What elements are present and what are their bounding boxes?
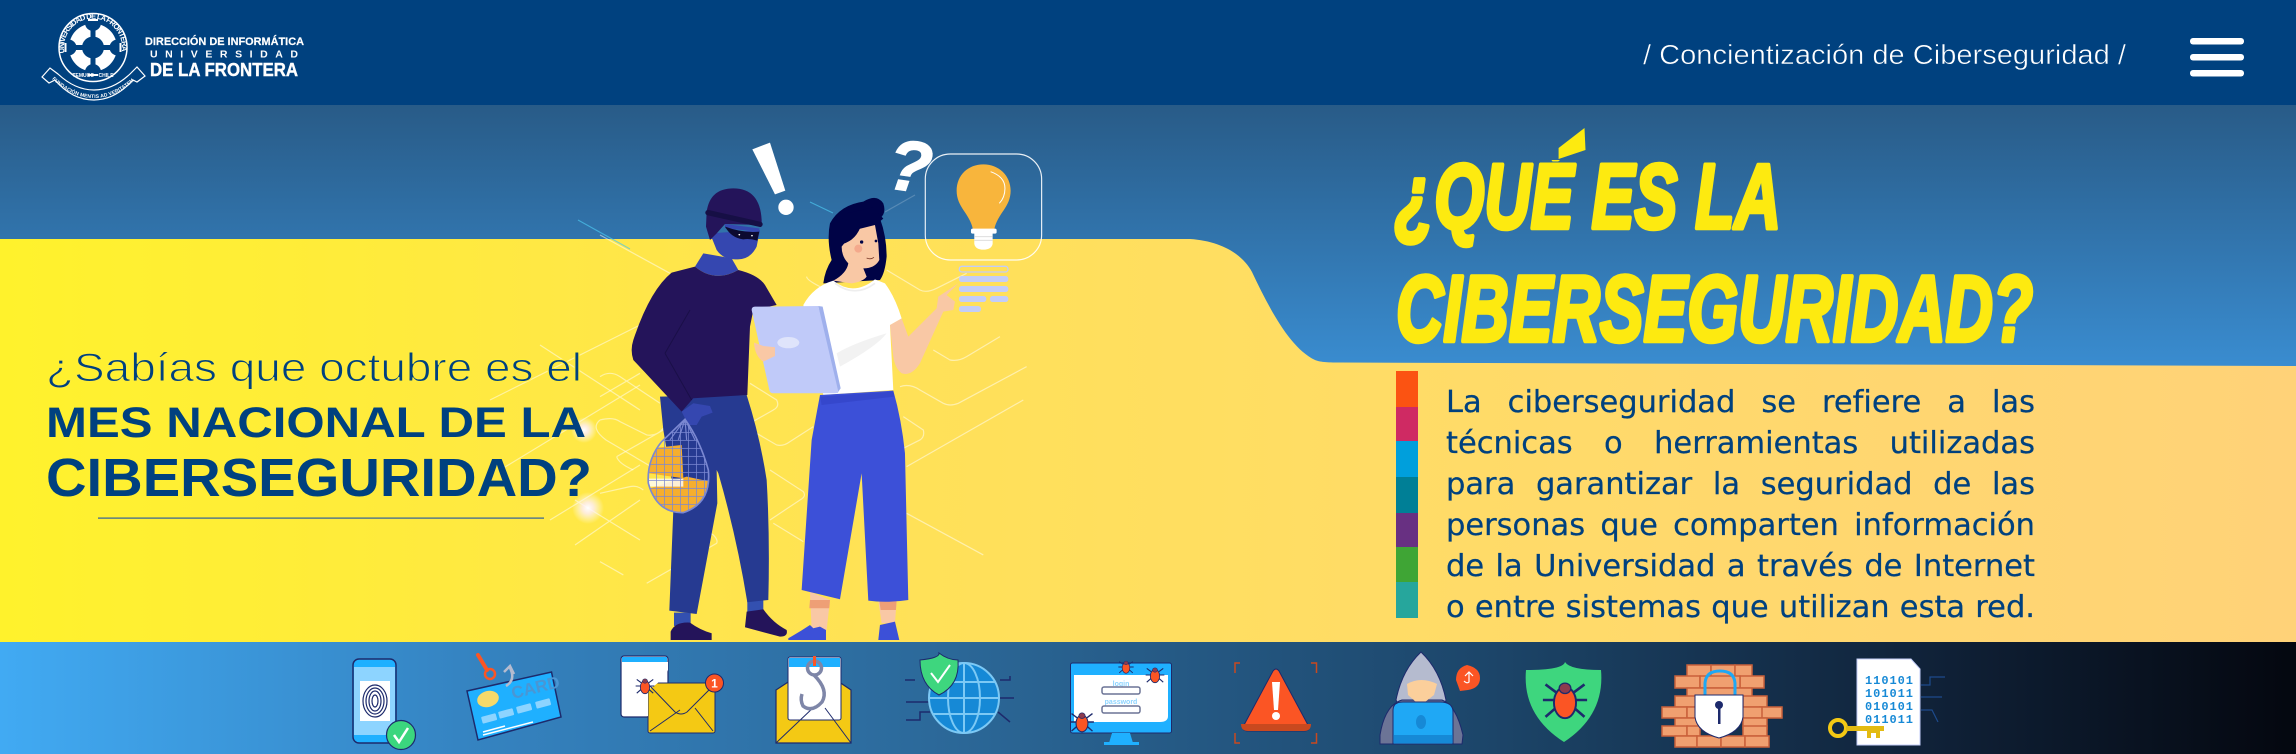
icon: lightbulb box <box>925 154 1042 260</box>
icon: hooded hacker <box>1380 652 1480 744</box>
yellow background wave <box>0 239 2296 645</box>
icon: binary document and key: 010101 <box>1865 700 1913 714</box>
paragraph: definition text: técnicas o herramientas utilizadas <box>1446 426 2035 461</box>
paragraph: definition text: La ciberseguridad se refiere a las <box>1446 385 2035 420</box>
paragraph: definition text <box>1446 385 2035 625</box>
intro question text: MES NACIONAL DE LA <box>46 399 586 447</box>
breadcrumb title: / Concientización de Ciberseguridad / <box>1643 39 2126 70</box>
icon: binary document and key: 011011 <box>1865 713 1913 727</box>
university logo: UNIVERSIDAD <box>150 48 298 60</box>
icon: malware email <box>621 656 724 733</box>
illustration: thief and woman <box>632 124 1042 640</box>
icon: text lines <box>959 266 1008 312</box>
intro question text: CIBERSEGURIDAD? <box>46 449 592 508</box>
circuit line background <box>490 195 1027 583</box>
icon: brick wall and padlock <box>1662 665 1782 747</box>
university logo: DE LA FRONTERA <box>150 60 298 80</box>
figure: woman <box>752 198 958 640</box>
icon: monitor with bugs <box>1070 661 1172 745</box>
bottom icon strip <box>0 642 2296 754</box>
icon: shield and globe <box>905 653 1014 733</box>
heading: que es la ciberseguridad: ¿QUÉ ES LA <box>1395 146 1781 248</box>
icon: hooked credit card <box>467 655 562 740</box>
icon: binary document and key: 110101 <box>1865 674 1913 688</box>
header bar <box>0 0 2296 105</box>
icon: hamburger menu <box>2190 38 2244 76</box>
background sky band <box>0 100 2296 370</box>
icon: malware email: 1 <box>711 676 718 690</box>
university logo: DIRECCIÓN DE INFORMÁTICA <box>145 35 304 48</box>
university logo: TEMUCO · CHILE <box>72 73 114 79</box>
icon: exclamation mark <box>752 143 794 215</box>
icon: monitor with bugs: password <box>1105 699 1137 706</box>
intro question text: ¿Sabías que octubre es el <box>46 346 582 390</box>
heading: que es la ciberseguridad: CIBERSEGURIDAD? <box>1396 256 2033 361</box>
icon: binary document and key: 101011 <box>1865 687 1913 701</box>
tablet <box>752 306 841 393</box>
figure: thief <box>632 188 787 640</box>
university logo: FUNDACIÓN MENTIS AD VERITATEM <box>52 76 134 98</box>
university logo: UNIVERSIDAD DE LA FRONTERA <box>60 14 126 54</box>
icon: question mark: ? <box>882 124 937 210</box>
glow sparks <box>571 417 604 524</box>
paragraph: definition text: personas que comparten información <box>1446 508 2035 543</box>
paragraph: definition text: para garantizar la seguridad de las <box>1446 467 2035 502</box>
colour stripe bar <box>1396 371 1418 618</box>
paragraph: definition text: o entre sistemas que utilizan esta red. <box>1446 590 2035 625</box>
heading: que es la ciberseguridad <box>1395 128 2033 361</box>
icon: phishing email <box>776 656 851 743</box>
icon: hooked credit card: CARD <box>509 673 562 703</box>
intro question text <box>46 346 592 519</box>
icon: warning triangle <box>1235 663 1316 743</box>
paragraph: definition text: de la Universidad a través de Internet <box>1446 549 2035 584</box>
icon: binary document and key <box>1830 659 1945 745</box>
bag with net <box>647 418 710 514</box>
icon: phone fingerprint <box>353 659 416 750</box>
university logo <box>41 12 304 101</box>
icon: monitor with bugs: login <box>1113 681 1129 688</box>
icon: bug shield <box>1526 662 1601 742</box>
